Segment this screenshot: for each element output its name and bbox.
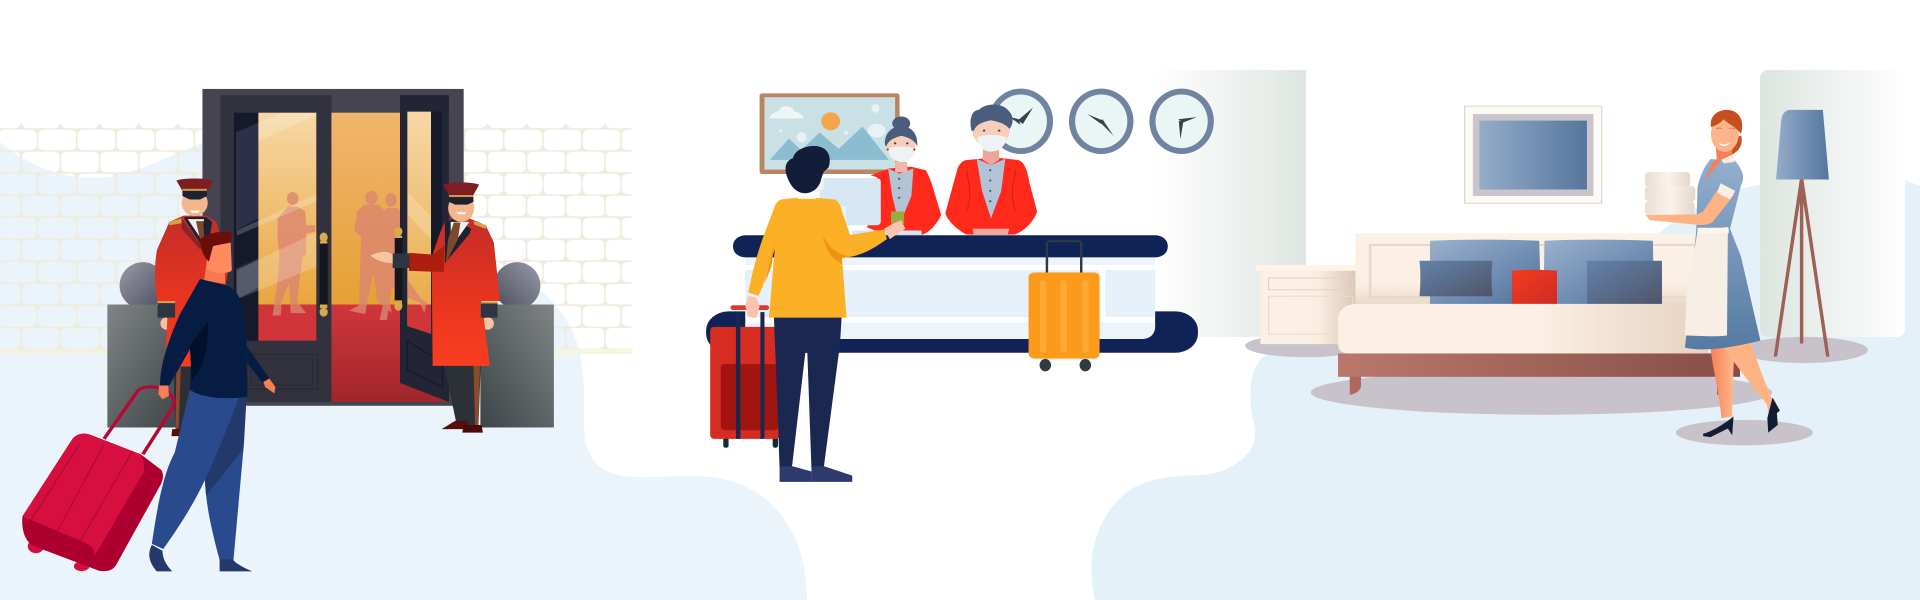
brick wall left: [0, 124, 202, 354]
hands: [158, 385, 169, 399]
pillows: [1420, 240, 1662, 305]
brick wall right: [464, 124, 633, 354]
shoes: [1703, 416, 1734, 437]
mask: [816, 177, 824, 193]
legs: [1711, 348, 1734, 418]
jeans: [152, 390, 247, 560]
floor lamp: [1776, 110, 1829, 355]
shoes: [149, 545, 172, 571]
hair: [1711, 110, 1742, 134]
collar: [798, 194, 816, 199]
glass reflections: [237, 113, 316, 299]
hair: [200, 232, 232, 261]
neck and face: [1716, 146, 1732, 162]
framed picture: [1465, 106, 1602, 203]
apron: [1685, 227, 1728, 336]
background blob: right: [1091, 180, 1920, 600]
sweater: [160, 279, 247, 398]
wall panel: room: [1760, 70, 1905, 337]
neck and face: [204, 267, 225, 284]
bed base: [1338, 353, 1740, 395]
credit card: [891, 212, 904, 224]
open door leaf: [400, 95, 449, 402]
maid: [1645, 110, 1780, 437]
towels: [1645, 172, 1695, 216]
scene: reception desk: [706, 89, 1214, 482]
arm: [1645, 187, 1734, 225]
customer: [745, 146, 905, 482]
clock 3: [1149, 89, 1214, 154]
guest with suitcase: [22, 232, 276, 571]
left handle: [320, 233, 328, 317]
wall panel: lobby: [1154, 70, 1306, 337]
planter right: [480, 262, 554, 427]
receptionist man: [945, 105, 1037, 235]
painting: [760, 93, 900, 174]
sweater: [748, 198, 887, 318]
cuff and hand: [884, 220, 905, 239]
receptionist woman: [867, 116, 941, 235]
door: [202, 89, 464, 406]
orange suitcase: [1029, 241, 1100, 371]
headboard: [1355, 233, 1700, 306]
right handle: [394, 227, 402, 311]
trousers: [774, 317, 842, 468]
hair back: [1730, 136, 1742, 156]
scene: hotel room: [1245, 106, 1868, 445]
red suitcase: [710, 305, 780, 448]
mattress: [1338, 304, 1708, 353]
clock 1: [989, 89, 1053, 154]
cap: [176, 178, 213, 216]
collar: [1721, 156, 1734, 163]
dress: [1685, 159, 1760, 349]
reception counter: [706, 235, 1198, 353]
hand on suitcase: [745, 296, 760, 318]
silhouette over open door: [407, 280, 427, 313]
silhouettes: [273, 191, 408, 320]
planter left: [107, 262, 181, 427]
floor shadows: [1245, 334, 1868, 445]
shoes: [780, 466, 811, 482]
nightstand: [1256, 265, 1356, 344]
suitcase handle: [104, 387, 174, 454]
doorman right: [371, 182, 500, 433]
hair: [786, 146, 830, 193]
clock 2: [1069, 89, 1133, 154]
scene: hotel entrance: [0, 89, 633, 571]
suitcase: [22, 434, 163, 571]
background blob: left: [0, 142, 807, 600]
doorman left: [155, 178, 229, 436]
monitor: [820, 178, 922, 235]
